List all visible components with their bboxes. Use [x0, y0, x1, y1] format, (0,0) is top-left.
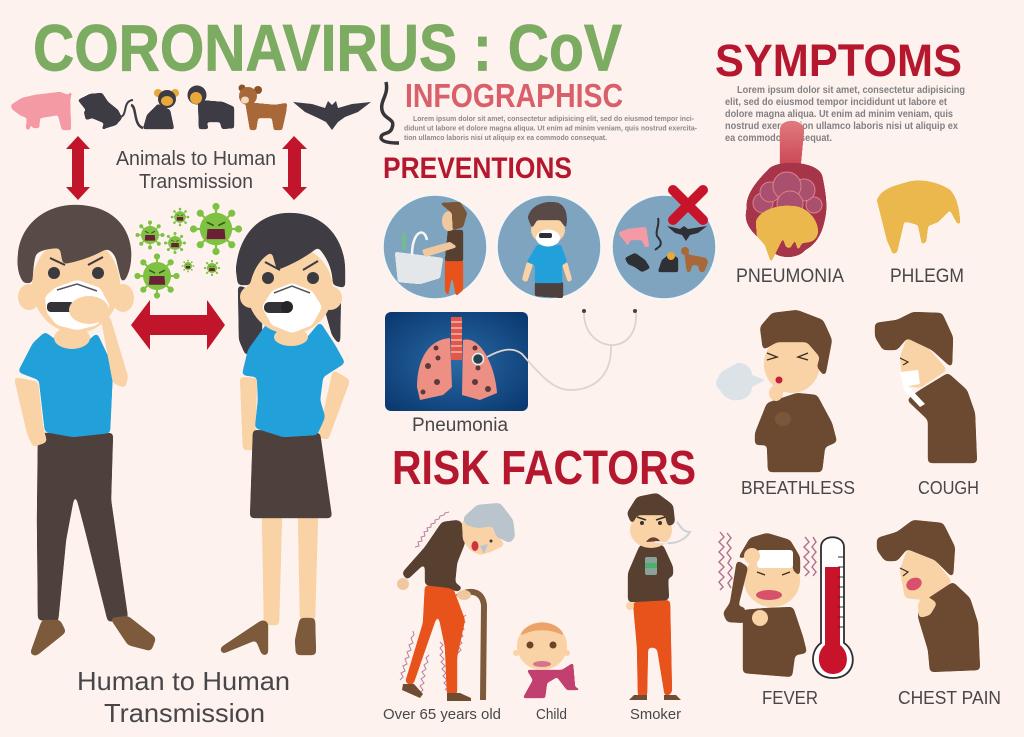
text block: infographisc [404, 116, 698, 142]
breath cloud [716, 363, 765, 400]
animals row [11, 82, 399, 143]
label: fever: FEVER [762, 687, 818, 708]
person [445, 260, 463, 296]
panel: wash hands [383, 195, 487, 299]
skirt [250, 430, 332, 518]
labels: risk factors: Smoker [630, 706, 681, 723]
icon: gorilla [188, 86, 234, 129]
title: CORONAVIRUS : CoV [33, 10, 622, 84]
eyes [262, 272, 274, 284]
text: animals to human transmission [116, 148, 276, 193]
torso [628, 545, 673, 602]
snake small [655, 218, 661, 250]
hand on chest [752, 610, 768, 626]
figure: breathless [716, 310, 837, 472]
panel: wear mask [497, 195, 601, 299]
hands [918, 595, 937, 618]
heading: symptoms: SYMPTOMS [715, 35, 962, 86]
panel: avoid animals [612, 195, 716, 299]
shoes [629, 695, 681, 700]
icon: phlegm [877, 181, 960, 254]
cane [458, 592, 484, 700]
text: human to human transmission: Human to Human [77, 666, 290, 696]
figure: chest pain [877, 520, 980, 672]
deer small [684, 250, 708, 272]
icon: stethoscope [487, 309, 637, 390]
labels: risk factors: Over 65 years old [383, 706, 501, 723]
torso [907, 373, 977, 463]
text block: symptoms: Lorem ipsum dolor sit amet, consectetur adipisicing [737, 85, 965, 96]
bat small [667, 226, 707, 241]
figure: woman with mask [220, 213, 350, 655]
hands [397, 578, 409, 590]
label: pneumonia: Pneumonia [412, 415, 508, 436]
hair [18, 205, 131, 283]
text: human to human transmission: Transmission [104, 698, 265, 728]
hand on head [744, 548, 760, 564]
mask [45, 280, 110, 330]
shoes [220, 618, 316, 655]
text block: symptoms: nostrud exercitation ullamco laboris nisi ut aliquip ex [725, 121, 958, 132]
back hair [238, 285, 341, 356]
label: pneumonia symptom: PNEUMONIA [736, 266, 844, 287]
head [630, 512, 672, 548]
label: cough: COUGH [918, 477, 979, 498]
icon: bat [293, 101, 371, 130]
pants [37, 433, 128, 622]
icon: thermometer [813, 537, 853, 678]
figure: fever [719, 532, 816, 677]
icon: red cross [673, 190, 703, 220]
face [32, 237, 120, 333]
text: human to human transmission [77, 666, 290, 728]
trachea [451, 317, 462, 360]
arrow: human to human [131, 300, 225, 350]
eyes [48, 267, 60, 279]
icon: deer [238, 84, 287, 130]
rat small [625, 253, 650, 272]
tube [264, 302, 292, 313]
face [247, 246, 333, 334]
panel: lungs [385, 312, 528, 411]
face [764, 335, 820, 393]
left arm [14, 377, 47, 447]
bandage [757, 550, 793, 568]
legs [262, 515, 318, 625]
face [462, 520, 505, 555]
tissue [900, 370, 925, 407]
figure: elderly person [397, 503, 515, 701]
figure: child [513, 622, 581, 698]
icon: monkey [131, 89, 179, 129]
face [900, 550, 952, 600]
text block: symptoms: ea commodo consequat. [725, 133, 832, 144]
arrow: animals to man [66, 136, 90, 200]
shirt [18, 332, 113, 437]
face [900, 338, 947, 388]
text: animals to human transmission: Animals to Human [116, 148, 276, 170]
smoke [665, 522, 690, 543]
heading: risk factors: RISK FACTORS [392, 442, 696, 495]
pig small [618, 227, 649, 247]
arrow: animals to woman [282, 136, 307, 200]
label: phlegm: PHLEGM [890, 266, 964, 287]
right lung [462, 339, 497, 400]
heading: preventions: PREVENTIONS [383, 152, 572, 185]
text: animals to human transmission: Transmission [139, 171, 253, 193]
shoes [402, 684, 471, 701]
figure: cough [875, 312, 977, 463]
torso [402, 520, 465, 592]
raised arm [723, 560, 748, 623]
labels: risk factors [383, 706, 681, 723]
text block: symptoms [725, 85, 965, 144]
hair [877, 520, 955, 578]
hand and arm [100, 313, 128, 388]
viruses [135, 204, 241, 298]
tremor lines [400, 512, 466, 693]
hand [626, 602, 634, 610]
mouth [756, 590, 782, 600]
hair [737, 533, 800, 577]
icon: pneumonia lungs [746, 121, 826, 262]
legs [405, 585, 465, 695]
labels: risk factors: Child [536, 706, 567, 723]
arms [240, 370, 350, 450]
text block: infographisc: tion ullamco laboris nisi ut aliquip ex ea commodo consequat. [404, 135, 607, 142]
shirt [242, 322, 345, 437]
sink [395, 252, 443, 284]
torso [755, 393, 837, 472]
label: chest pain: CHEST PAIN [898, 687, 1001, 708]
monkey small [658, 254, 678, 272]
figure: man with mask [14, 205, 156, 656]
tube [47, 302, 74, 312]
hair [875, 312, 953, 368]
figure: smoker [626, 493, 690, 700]
pants [633, 600, 672, 697]
hair [236, 213, 345, 288]
heading: infographisc: INFOGRAPHISC [405, 77, 623, 114]
text block: symptoms: elit, sed do eiusmod tempor incididunt ut labore et [725, 97, 948, 108]
mask [262, 283, 322, 333]
label: breathless: BREATHLESS [741, 477, 855, 498]
shoes [30, 616, 156, 656]
torso [918, 582, 980, 672]
left lung [417, 338, 452, 400]
icon: snake [381, 82, 399, 143]
text block: infographisc: didunt ut labore et dolore magna aliqua. Ut enim ad minim veniam, quis nostrud exercita- [404, 126, 698, 132]
hair [463, 503, 515, 543]
face [744, 553, 800, 607]
pack [645, 557, 657, 575]
torso [743, 607, 807, 677]
icon: rat [78, 93, 133, 130]
icon: pig [11, 91, 72, 130]
hands [769, 385, 783, 401]
heat lines [719, 532, 816, 590]
text block: symptoms: dolore magna aliqua. Ut enim ad minim veniam, quis [725, 109, 953, 120]
mouth [904, 575, 924, 593]
hair [760, 310, 832, 377]
text block: infographisc: Lorem ipsum dolor sit amet, consectetur adipisicing elit, sed do eiusmod tempor inci- [413, 116, 695, 123]
